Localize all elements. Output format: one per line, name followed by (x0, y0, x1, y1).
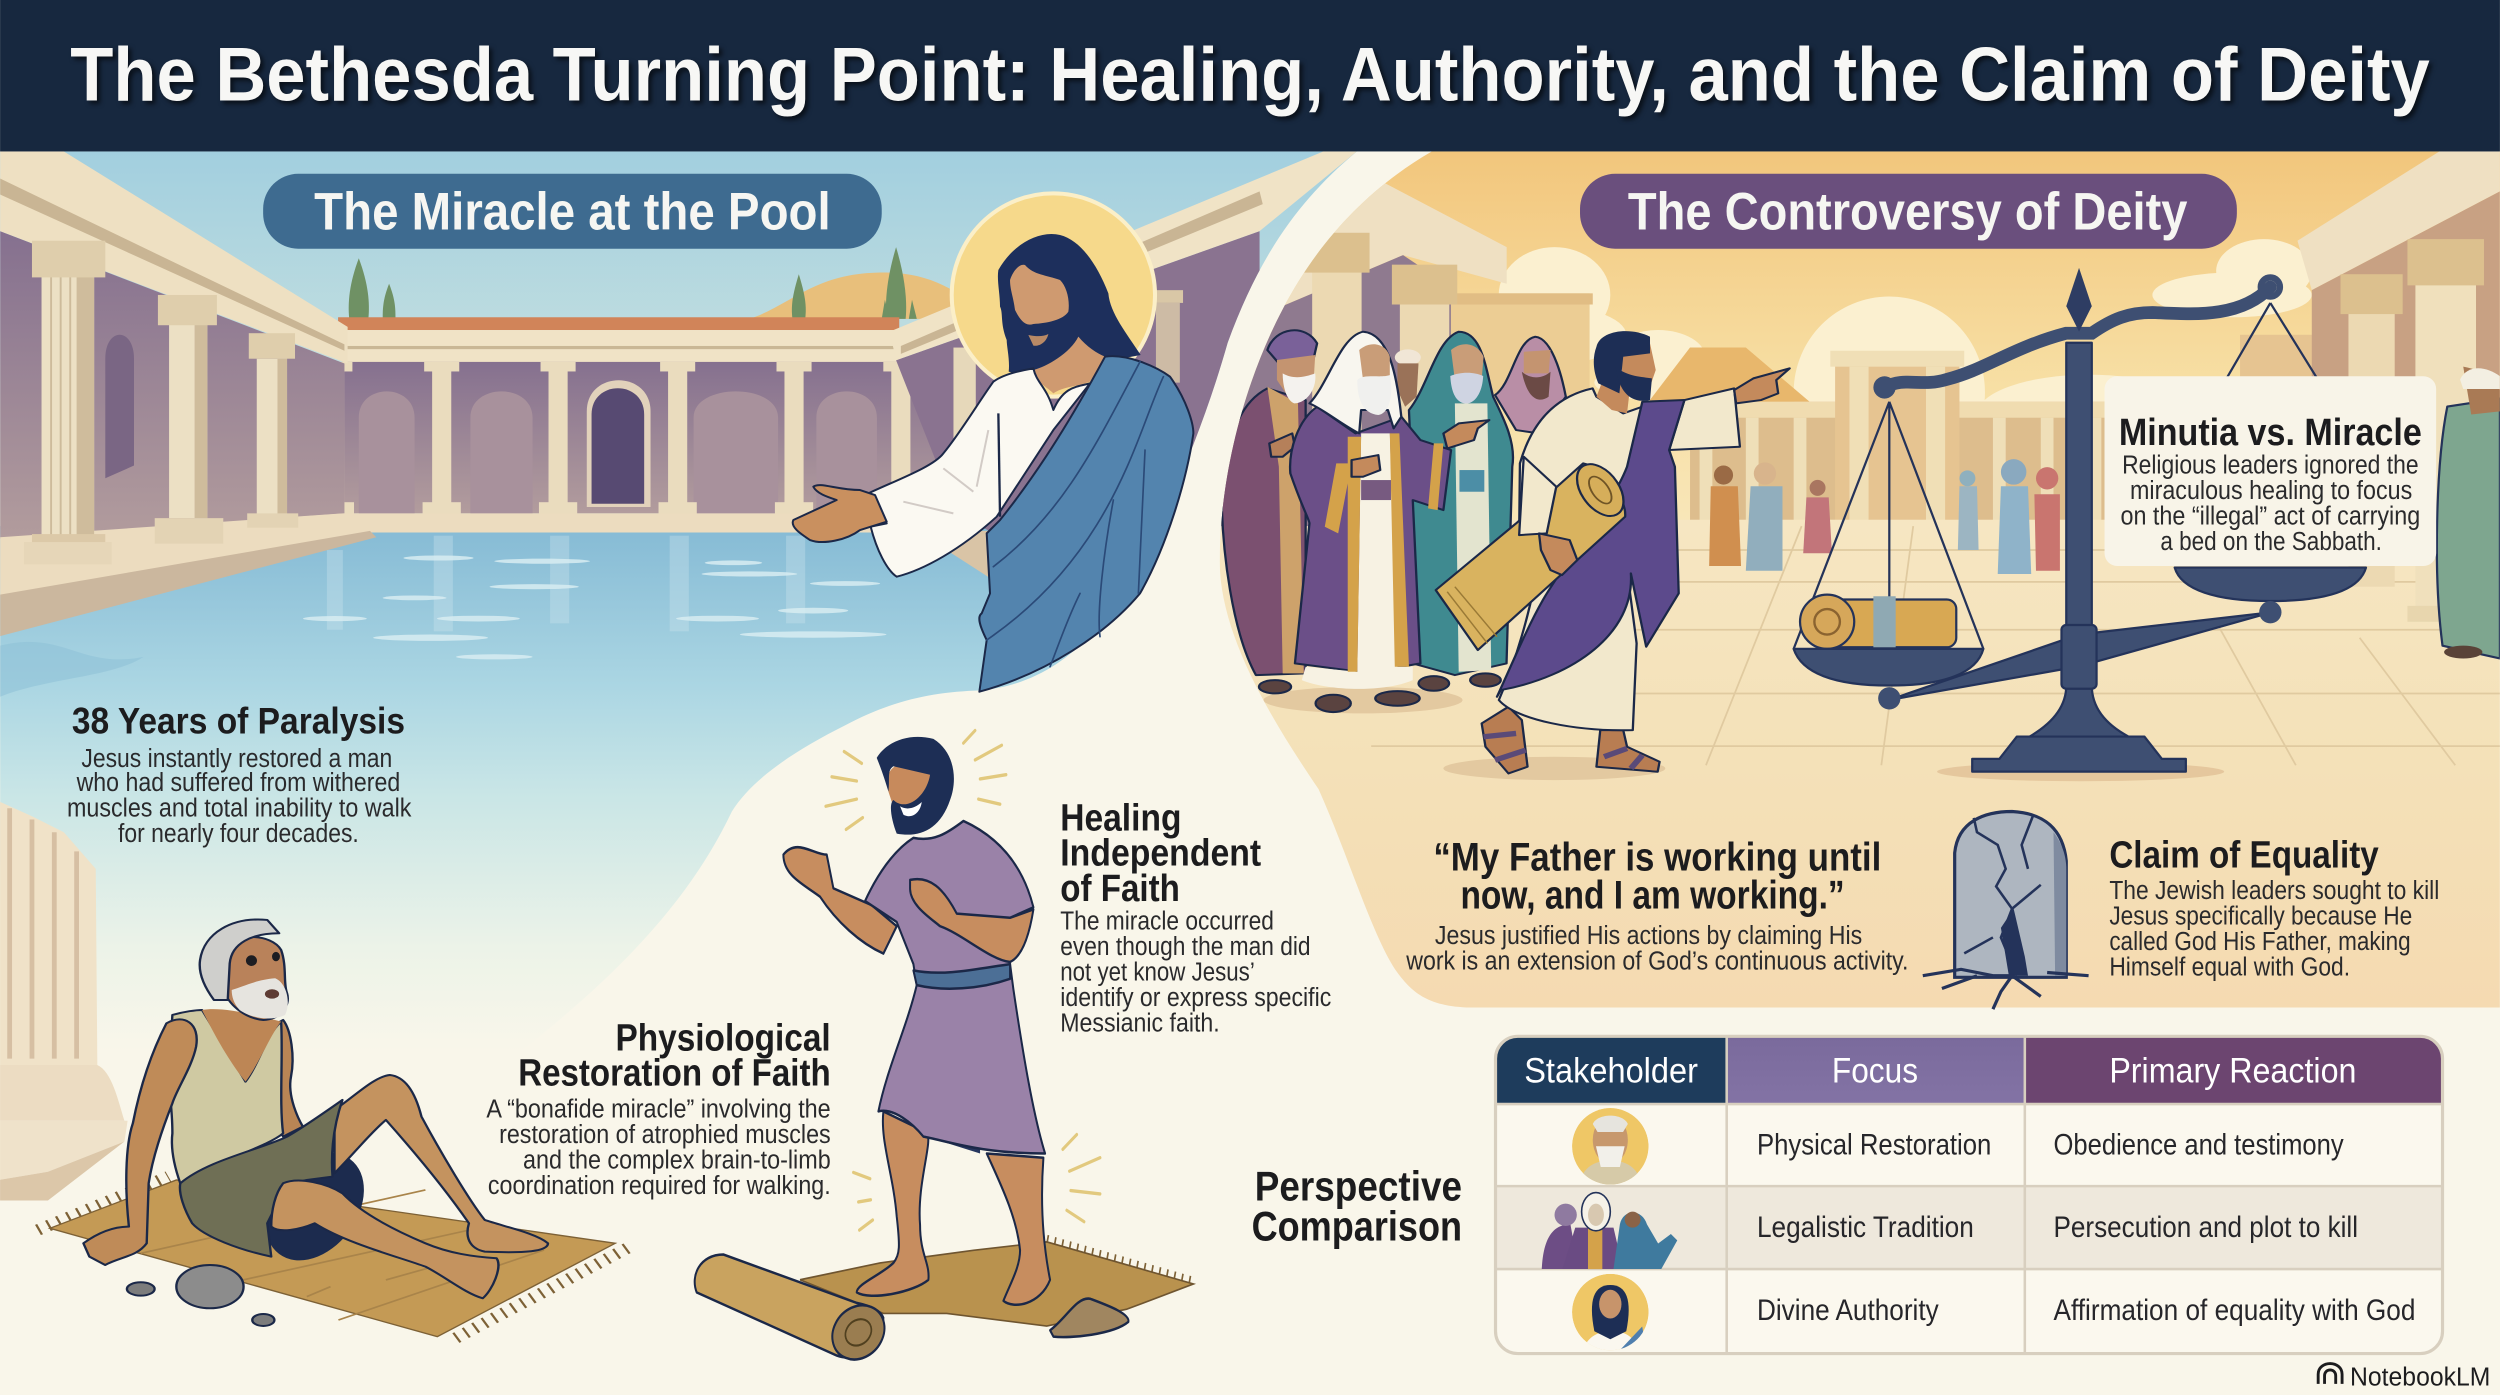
quote: My Father is working: now, and I am working.” (1460, 874, 1845, 918)
heading: Perspective Comparison: Comparison (1252, 1202, 1462, 1249)
text: Physiological Restoration of Faith: A “bonafide miracle” involving the (486, 1096, 831, 1124)
callout: Minutia vs. Miracle: Religious leaders ignored the (2122, 452, 2419, 480)
face (1010, 265, 1069, 325)
background buildings (1443, 293, 2336, 526)
tunic underside (923, 1120, 980, 1153)
text: Claim of Equality: called God His Father, making (2109, 928, 2411, 956)
hair (200, 920, 279, 1000)
text: Healing Independent of Faith (1060, 797, 1332, 1038)
panel: the controversy of deity scene (1196, 151, 2500, 1008)
text: Healing Independent of Faith: The miracle occurred (1060, 907, 1274, 935)
callout: Minutia vs. Miracle: on the “illegal” act of carrying (2120, 503, 2420, 531)
quote: My Father is working: Jesus justified His actions by claiming His (1435, 922, 1862, 950)
icon: cracked stone tablet (1923, 811, 2089, 1009)
callout: Minutia vs. Miracle: Minutia vs. Miracle (2119, 411, 2422, 454)
text: Physiological Restoration of Faith: and the complex brain-to-limb (523, 1147, 831, 1175)
raised leg (334, 1075, 548, 1252)
quote: My Father is working (1405, 835, 1908, 975)
text: Claim of Equality (2109, 833, 2439, 982)
back wall of colonnade (316, 317, 965, 515)
text: Healing Independent of Faith: Messianic faith. (1060, 1010, 1220, 1038)
priest: pink hood (1495, 337, 1566, 433)
text: 38 Years of Paralysis: who had suffered from withered (76, 769, 400, 797)
heading pill: The Controversy of Deity: The Controversy of Deity (1628, 183, 2187, 242)
priest: white hood (1290, 332, 1489, 689)
chest (202, 1009, 281, 1082)
row: religious leaders: Legalistic Tradition (1757, 1211, 1974, 1244)
bed roll (1436, 463, 1625, 650)
text: Physiological Restoration of Faith: Physiological (615, 1017, 831, 1060)
text: 38 Years of Paralysis (67, 700, 412, 848)
scales of justice (1794, 268, 2366, 781)
tunic (865, 821, 1045, 1153)
far arm (271, 1020, 303, 1137)
text: Physiological Restoration of Faith: Restoration of Faith (518, 1052, 831, 1095)
text: Claim of Equality: Claim of Equality (2109, 833, 2379, 876)
text: Healing Independent of Faith: of Faith (1060, 867, 1180, 910)
text: Healing Independent of Faith: Healing (1060, 797, 1181, 840)
text: Healing Independent of Faith: identify or express specific (1060, 984, 1332, 1012)
left wing of colonnade (0, 151, 957, 636)
text: Healing Independent of Faith: even though the man did (1060, 933, 1311, 961)
arm on chest (910, 879, 1033, 962)
neck (1033, 337, 1105, 393)
callout: Minutia vs. Miracle (2105, 376, 2436, 566)
heading: Perspective Comparison: Perspective (1255, 1162, 1462, 1209)
beard (232, 978, 288, 1018)
text: Physiological Restoration of Faith (486, 1017, 831, 1200)
logo: NotebookLM: NotebookLM (2350, 1363, 2490, 1391)
text: Healing Independent of Faith: not yet know Jesus’ (1060, 958, 1255, 986)
walking man arm and hand (1519, 457, 1556, 535)
panel: the miracle at the pool scene (0, 152, 1356, 988)
text: 38 Years of Paralysis: for nearly four decades. (118, 820, 359, 848)
mat fringe (38, 1177, 627, 1342)
vest (168, 1010, 283, 1183)
floor (1196, 520, 2500, 1008)
glow rays (826, 731, 1100, 1230)
text: 38 Years of Paralysis: muscles and total inability to walk (67, 794, 412, 822)
white robe (868, 368, 1090, 577)
heading pill: The Miracle at the Pool: The Miracle at the Pool (314, 183, 831, 242)
table header row (1524, 1052, 2356, 1091)
text: Physiological Restoration of Faith: coordination required for walking. (488, 1172, 831, 1200)
shorts (180, 1100, 342, 1257)
callout: Minutia vs. Miracle: a bed on the Sabbath. (2160, 528, 2382, 556)
distant small figures (1709, 459, 2060, 574)
text: Claim of Equality: The Jewish leaders sought to kill (2109, 877, 2439, 905)
face (888, 760, 943, 821)
rock (1050, 1299, 1129, 1337)
rolled bed on pan (1800, 595, 1956, 649)
text: Physiological Restoration of Faith: restoration of atrophied muscles (499, 1121, 831, 1149)
text: Claim of Equality: Jesus specifically because He (2109, 903, 2412, 931)
table header row: Primary Reaction (2109, 1052, 2356, 1091)
text: Claim of Equality: Himself equal with God. (2109, 954, 2350, 982)
quote: My Father is working: “My Father is working until (1433, 835, 1881, 879)
callout: Minutia vs. Miracle: miraculous healing to focus (2130, 477, 2412, 505)
sun and clouds (1498, 239, 2312, 402)
roll (695, 1255, 883, 1357)
row: healed man: Physical Restoration (1757, 1128, 1991, 1161)
table header row: Stakeholder (1524, 1052, 1698, 1091)
column at lower left (0, 802, 128, 1200)
walking man robe (1499, 388, 1642, 730)
hair and beard (877, 737, 954, 835)
quote: My Father is working: work is an extension of God’s continuous activity. (1405, 947, 1908, 975)
row: Jesus: Divine Authority (1757, 1294, 1939, 1327)
walking man head (1596, 384, 1629, 414)
title bar (0, 0, 2500, 151)
icon: paralysed man on mat (38, 920, 627, 1342)
hair (998, 234, 1141, 375)
icon: healed man standing on rolled mat (695, 731, 1193, 1368)
row: Jesus: Affirmation of equality with God (2054, 1294, 2415, 1327)
extended leg (271, 1181, 498, 1298)
hill and cypress trees (349, 247, 989, 319)
mat (50, 1180, 615, 1337)
right temple (2297, 151, 2500, 622)
text: Healing Independent of Faith: Independent (1060, 832, 1261, 875)
priest: purple turban (1221, 330, 1317, 675)
right wing of colonnade (890, 151, 1357, 599)
table header row: Focus (1832, 1052, 1918, 1091)
row: religious leaders (1542, 1193, 2358, 1269)
row: healed man: Obedience and testimony (2054, 1128, 2344, 1161)
near arm (83, 1019, 197, 1265)
text: 38 Years of Paralysis: 38 Years of Paralysis (72, 700, 405, 741)
small background priest (1395, 349, 1421, 407)
heading: Perspective Comparison (1252, 1162, 1462, 1249)
walking man feet (1482, 707, 1660, 773)
row: religious leaders: Persecution and plot to kill (2054, 1211, 2358, 1244)
mat (1047, 1240, 1193, 1282)
row: Jesus (1572, 1274, 2415, 1354)
blue mantle (979, 356, 1193, 692)
icon: Jesus with halo (793, 193, 1193, 692)
shadow under legs (246, 1139, 383, 1274)
legs (857, 1111, 929, 1296)
ground shadow (1264, 687, 1463, 713)
belt (913, 964, 1010, 989)
purple sash (1497, 400, 1684, 697)
table: perspective comparison (1496, 1036, 2443, 1354)
water reflections and ripples (303, 536, 887, 659)
open hand (793, 485, 887, 542)
left temple (1221, 184, 1507, 526)
priest: teal hood (1409, 332, 1513, 675)
raised arm (783, 847, 897, 954)
face (221, 937, 288, 1020)
sandals of priests (1259, 673, 1501, 712)
stones (176, 1265, 244, 1308)
row: healed man (1572, 1108, 2344, 1188)
man at right edge (2437, 367, 2500, 658)
text: 38 Years of Paralysis: Jesus instantly restored a man (81, 745, 392, 773)
priests and man carrying bed (1221, 330, 1790, 780)
